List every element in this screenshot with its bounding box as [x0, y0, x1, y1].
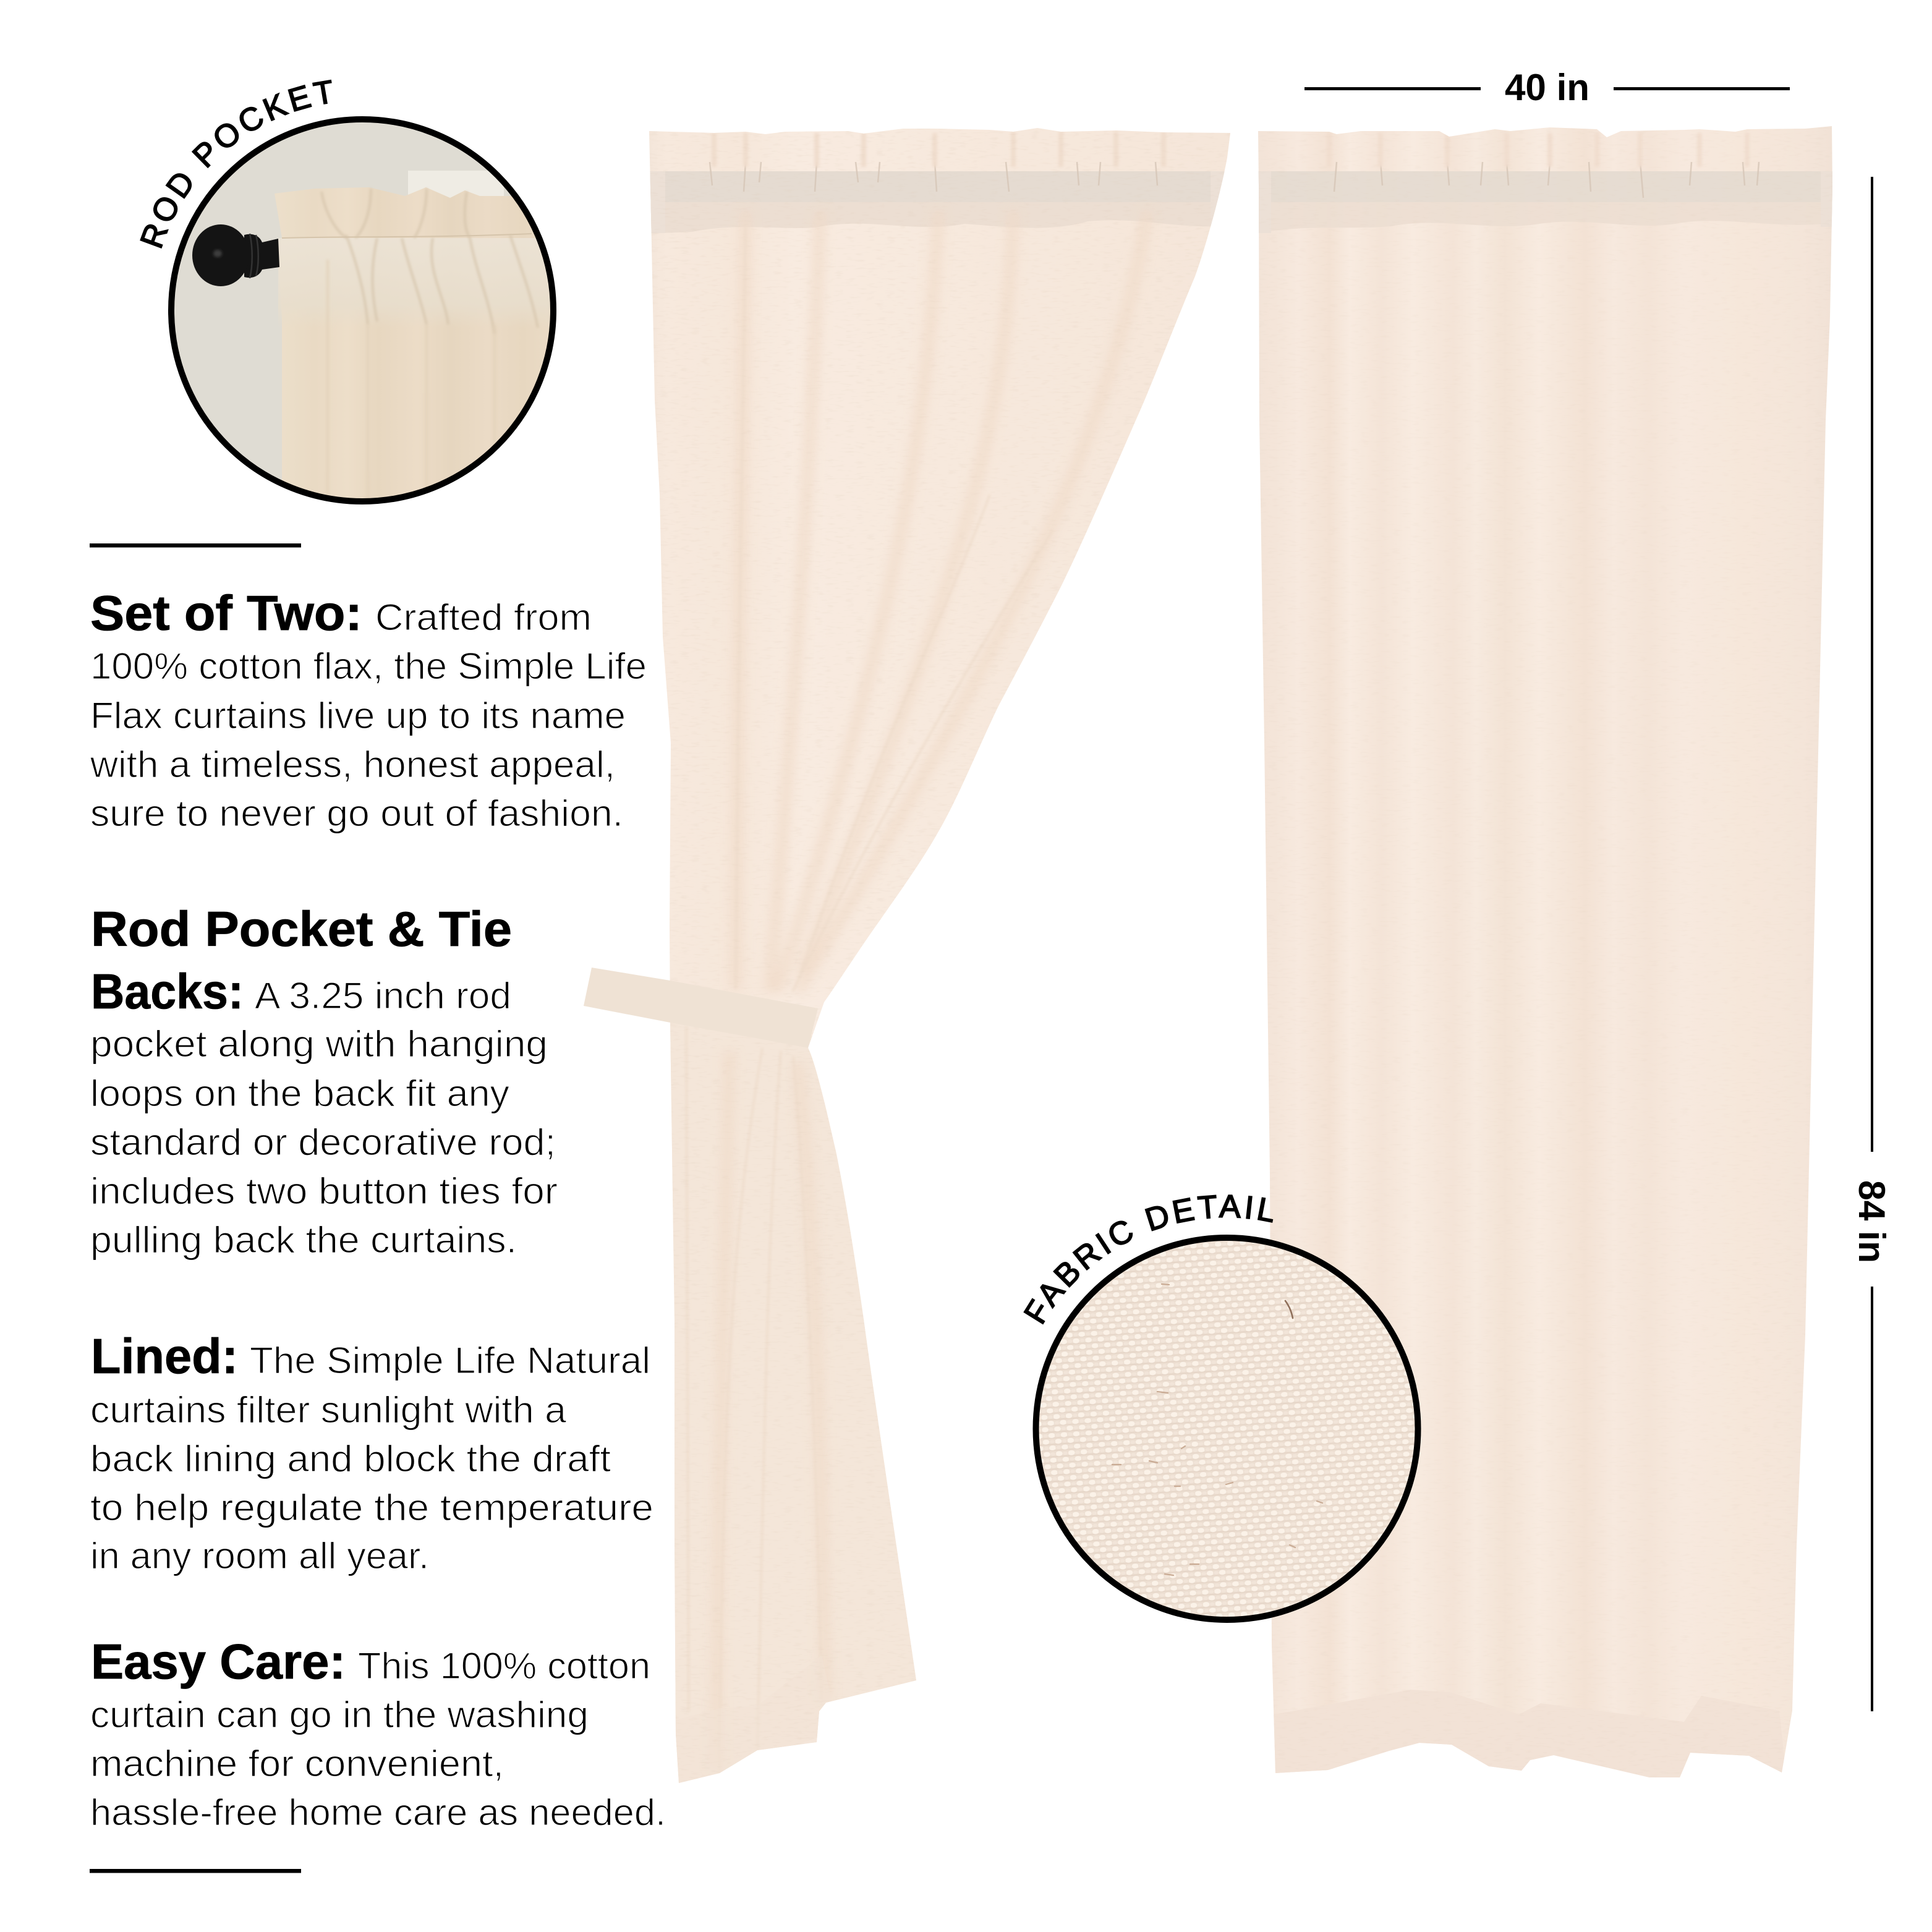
curtain panel: right, hanging straight: [1255, 124, 1836, 1793]
height dimension: 84 in: 84 in: [1851, 1180, 1892, 1263]
text block: Rod Pocket and Tie Backs: includes two button ties for: [90, 1170, 558, 1212]
text block: Rod Pocket and Tie Backs: standard or decorative rod;: [90, 1121, 556, 1163]
text block: Lined: to help regulate the temperature: [90, 1487, 653, 1528]
text block: Rod Pocket and Tie Backs: Rod Pocket & Tie: [91, 901, 512, 956]
text block: Easy Care: [90, 1634, 666, 1833]
text block: Lined: back lining and block the draft: [90, 1438, 611, 1479]
text block: Set of Two: Flax curtains live up to its name: [90, 695, 626, 736]
text block: Rod Pocket and Tie Backs: pocket along with hanging: [90, 1023, 548, 1065]
text block: Lined: curtains filter sunlight with a: [90, 1389, 567, 1431]
callout: fabric detail swatch: FABRIC DETAIL: [1023, 1194, 1274, 1324]
text block: Easy Care: curtain can go in the washing: [90, 1694, 589, 1735]
divider: top rule: [90, 543, 301, 548]
text block: Easy Care: Easy Care:: [91, 1634, 346, 1689]
text block: Set of Two: with a timeless, honest appeal,: [90, 744, 615, 785]
text block: Set of Two: 100% cotton flax, the Simple Life: [90, 645, 647, 687]
width dimension: 40 in: 40 in: [1505, 67, 1589, 108]
text block: Set of Two: [90, 585, 647, 834]
icon: black rod finial: [192, 224, 279, 286]
text block: Rod Pocket and Tie Backs: pulling back the curtains.: [90, 1219, 517, 1261]
tie-back strap: [584, 968, 818, 1048]
text block: Rod Pocket and Tie Backs: A 3.25 inch rod: [255, 975, 511, 1016]
text block: Rod Pocket and Tie Backs: Backs:: [91, 964, 244, 1019]
height dimension: 84 in: [1851, 177, 1892, 1711]
text block: Lined: The Simple Life Natural: [250, 1340, 650, 1381]
text block: Lined: in any room all year.: [90, 1535, 429, 1577]
width dimension: 40 in: [1304, 67, 1790, 108]
text block: Easy Care: This 100% cotton: [358, 1645, 650, 1687]
text block: Lined: Lined:: [91, 1329, 238, 1384]
text block: Set of Two: Crafted from: [375, 597, 592, 638]
text block: Lined: [90, 1329, 653, 1577]
text block: Easy Care: machine for convenient,: [90, 1743, 504, 1784]
text block: Set of Two: Set of Two:: [90, 585, 362, 640]
divider: bottom rule: [90, 1869, 301, 1873]
callout: rod pocket photo: [140, 79, 556, 504]
text block: Rod Pocket and Tie Backs: loops on the back fit any: [90, 1073, 509, 1114]
text block: Set of Two: sure to never go out of fashion.: [90, 793, 623, 834]
callout: fabric detail swatch: [1023, 1194, 1421, 1623]
text block: Easy Care: hassle-free home care as needed.: [90, 1792, 666, 1833]
callout: rod pocket photo: ROD POCKET: [140, 79, 332, 249]
curtain panel: left, tied back: [584, 124, 1236, 1793]
text block: Rod Pocket and Tie Backs: [90, 901, 558, 1261]
